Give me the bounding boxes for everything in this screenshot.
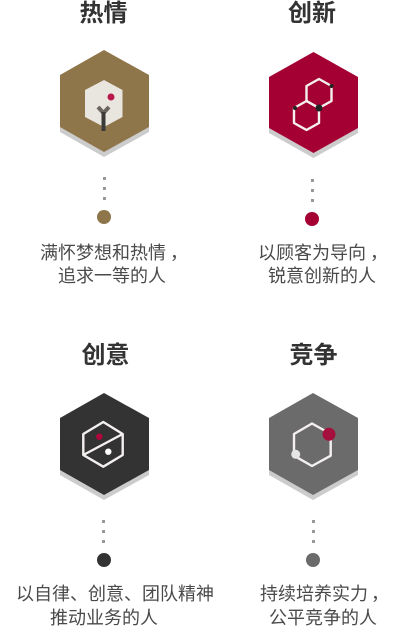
marker dot — [306, 553, 320, 567]
icon: gray hexagon — [269, 393, 358, 500]
dotted connector — [103, 177, 106, 200]
description: 追求一等的人 — [58, 266, 166, 286]
panel: innovation — [258, 0, 388, 286]
description: 以自律、创意、团队精神 — [16, 584, 214, 604]
marker dot — [97, 553, 111, 567]
panel: passion — [40, 0, 188, 286]
description: ， — [370, 243, 388, 263]
dotted connector — [312, 520, 315, 543]
panel: competition — [260, 342, 389, 628]
icon: dark hexagon — [60, 393, 149, 500]
description: 锐意创新的人 — [268, 266, 376, 286]
heading: passion: 热情 — [80, 0, 128, 27]
icon: brown hexagon — [60, 50, 149, 157]
description: 推动业务的人 — [50, 608, 158, 628]
dotted connector — [311, 179, 314, 202]
panel: creativity — [16, 341, 214, 628]
description: ， — [371, 584, 389, 604]
heading: competition: 竞争 — [290, 342, 338, 369]
description: ， — [170, 243, 188, 263]
description: 以顾客为导向 — [258, 243, 366, 263]
marker dot — [305, 212, 319, 226]
heading: innovation: 创新 — [288, 0, 336, 27]
dotted connector — [102, 520, 105, 543]
description: 公平竞争的人 — [269, 608, 377, 628]
marker dot — [97, 210, 111, 224]
description: 满怀梦想和热情 — [40, 243, 166, 263]
heading: creativity: 创意 — [82, 341, 130, 369]
icon: crimson hexagon — [269, 52, 358, 158]
description: 持续培养实力 — [260, 584, 368, 604]
